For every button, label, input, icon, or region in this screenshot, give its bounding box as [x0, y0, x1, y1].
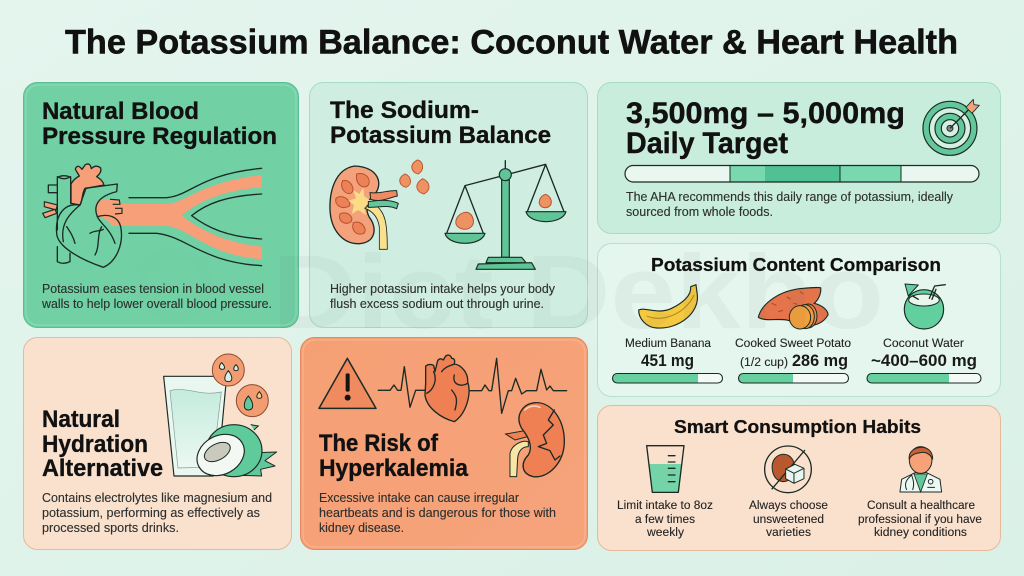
icon: measuring cup — [647, 446, 684, 492]
caption: unsweetened: Always choose — [749, 498, 828, 512]
item: medium banana: 451 mg — [641, 352, 694, 370]
body text: hyperkalemia: kidney disease. — [319, 521, 404, 535]
heading: smart consumption habits: Smart Consumption Habits — [674, 417, 921, 437]
item: cooked sweet potato: 286 mg — [792, 352, 848, 370]
heading: risk of hyperkalemia: The Risk of — [319, 430, 439, 457]
panel: natural hydration alternative — [24, 338, 292, 550]
icon: damaged kidney — [506, 403, 564, 477]
caption: limit intake: weekly — [646, 525, 685, 539]
icon: doctor — [900, 447, 942, 492]
icon: balance scale — [445, 161, 566, 269]
item: cooked sweet potato: (1/2 cup) — [740, 355, 788, 369]
heading: natural hydration alternative: Natural — [42, 406, 120, 433]
body text: AHA recommendation: sourced from whole foods. — [626, 205, 773, 219]
heading: sodium-potassium balance — [330, 97, 551, 149]
body text: hydration: Contains electrolytes like magnesium and — [42, 491, 272, 505]
caption: limit intake — [617, 498, 713, 539]
icon: kidney with sodium particles — [330, 160, 429, 249]
heading: natural blood pressure regulation — [42, 98, 277, 150]
caption: consult professional — [858, 498, 982, 539]
body text: sodium balance: Higher potassium intake helps your body — [330, 282, 556, 296]
panel: daily target — [598, 82, 1000, 234]
heading: natural hydration alternative: Alternative — [42, 455, 163, 482]
caption: unsweetened — [749, 498, 828, 539]
icon: coconut drink — [904, 284, 945, 329]
panel: smart consumption habits — [598, 406, 1000, 550]
icon: artery branching — [120, 168, 262, 266]
body text: blood pressure — [41, 282, 272, 311]
heading: potassium content comparison: Potassium Content Comparison — [651, 255, 941, 275]
heading: natural blood pressure regulation: Pressure Regulation — [42, 123, 277, 150]
heading: risk of hyperkalemia: Hyperkalemia — [319, 455, 469, 482]
heading: daily target range: Daily Target — [626, 127, 788, 160]
item: cooked sweet potato: Cooked Sweet Potato — [735, 336, 851, 350]
heading: sodium-potassium balance: The Sodium- — [330, 97, 479, 124]
icon: irregular heartbeat line — [378, 358, 567, 413]
body text: blood pressure: walls to help lower overall blood pressure. — [41, 297, 272, 311]
heading: natural hydration alternative — [42, 406, 163, 482]
icon: coconut and leaves — [190, 425, 277, 484]
body text: sodium balance — [330, 282, 556, 311]
panel: potassium content comparison — [598, 244, 1000, 396]
item: medium banana — [612, 336, 722, 383]
item: coconut water — [867, 336, 981, 383]
item: cooked sweet potato — [735, 336, 851, 383]
item: medium banana: Medium Banana — [625, 336, 711, 350]
body text: AHA recommendation: The AHA recommends this daily range of potassium, ideally — [626, 190, 954, 204]
range bar — [625, 166, 979, 182]
heading: risk of hyperkalemia — [319, 430, 469, 482]
title: The Potassium Balance: Coconut Water & Heart Health — [65, 24, 958, 62]
caption: consult professional: Consult a healthcare — [867, 498, 975, 512]
icon: glass of coconut water — [164, 376, 227, 476]
icon: electrolyte droplets — [212, 354, 268, 417]
heading: sodium-potassium balance: Potassium Balance — [330, 122, 551, 149]
heading: daily target range — [626, 97, 905, 160]
body text: blood pressure: Potassium eases tension in blood vessel — [42, 282, 264, 296]
panel: natural blood pressure regulation — [24, 82, 298, 328]
body text: hydration: processed sports drinks. — [42, 521, 179, 535]
heading: natural hydration alternative: Hydration — [42, 431, 148, 458]
panel: risk of hyperkalemia — [300, 338, 588, 550]
body text: hydration: potassium, performing as effectively as — [42, 506, 260, 520]
item: coconut water: ~400–600 mg — [871, 352, 977, 370]
panel: sodium-potassium balance — [310, 82, 588, 328]
heading: natural blood pressure regulation: Natural Blood — [42, 98, 199, 125]
body text: hyperkalemia — [319, 491, 556, 535]
icon: heart — [425, 355, 469, 422]
icon: banana — [639, 285, 697, 328]
icon: sweet potato — [758, 288, 828, 329]
body text: AHA recommendation — [626, 190, 954, 219]
icon: target with arrow — [923, 99, 979, 155]
caption: unsweetened: unsweetened — [753, 512, 824, 526]
body text: hyperkalemia: Excessive intake can cause irregular — [319, 491, 519, 505]
body text: sodium balance: flush excess sodium out through urine. — [330, 297, 544, 311]
icon: no added sugar — [765, 446, 811, 493]
watermark: Dict Dekho — [272, 234, 884, 351]
heading: daily target range: 3,500mg – 5,000mg — [626, 97, 905, 130]
caption: unsweetened: varieties — [766, 525, 811, 539]
caption: limit intake: Limit intake to 8oz — [617, 498, 713, 512]
caption: consult professional: kidney conditions — [874, 525, 967, 539]
body text: hydration — [42, 491, 272, 535]
caption: consult professional: professional if you have — [858, 512, 982, 526]
icon: anatomical heart — [43, 164, 123, 267]
item: coconut water: Coconut Water — [883, 336, 964, 350]
icon: warning triangle — [319, 358, 376, 408]
caption: limit intake: a few times — [635, 512, 695, 526]
body text: hyperkalemia: heartbeats and is dangerous for those with — [319, 506, 556, 520]
